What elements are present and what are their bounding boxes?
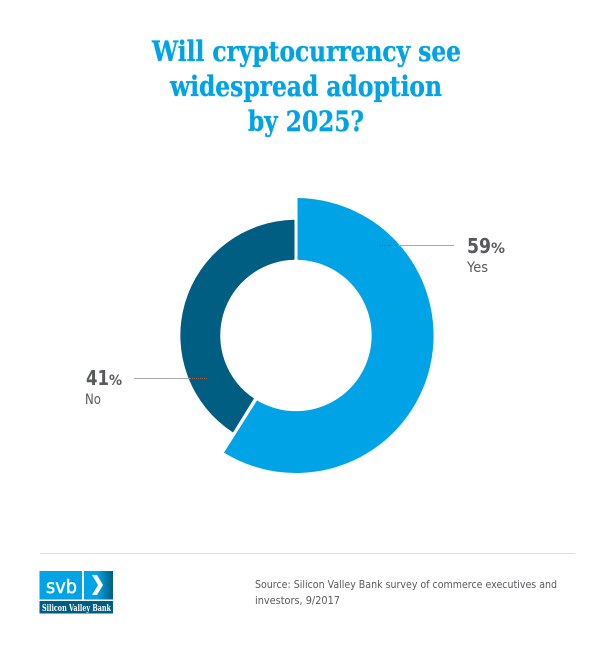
label: 41% No: No bbox=[85, 392, 101, 408]
title: by 2025? bbox=[248, 105, 364, 138]
leader line: Yes bbox=[380, 244, 454, 246]
source note bbox=[255, 579, 557, 607]
label: 59% Yes: 59 bbox=[467, 234, 491, 258]
segment: No 41% bbox=[180, 220, 294, 432]
source note: Source: Silicon Valley Bank survey of commerce executives and bbox=[255, 579, 557, 591]
title: widespread adoption bbox=[169, 70, 442, 103]
segment: Yes 59% bbox=[224, 198, 434, 473]
logo bar: Silicon Valley Bank: Silicon Valley Bank bbox=[42, 604, 112, 614]
label: 41% No: % bbox=[109, 373, 122, 389]
label: 59% Yes: Yes bbox=[466, 260, 488, 276]
label: 59% Yes: % bbox=[491, 241, 505, 257]
label: 59% Yes bbox=[466, 234, 505, 276]
donut chart bbox=[180, 198, 434, 473]
leader line: No bbox=[134, 378, 207, 380]
logo: svb bbox=[40, 571, 113, 614]
logo box: svb wordmark: svb bbox=[46, 576, 77, 598]
title: Will cryptocurrency see bbox=[151, 35, 461, 68]
label: 41% No: 41 bbox=[86, 366, 109, 390]
logo box: chevron bbox=[84, 571, 113, 600]
label: 41% No bbox=[85, 366, 122, 408]
title bbox=[151, 35, 461, 138]
source note: investors, 9/2017 bbox=[255, 595, 340, 607]
